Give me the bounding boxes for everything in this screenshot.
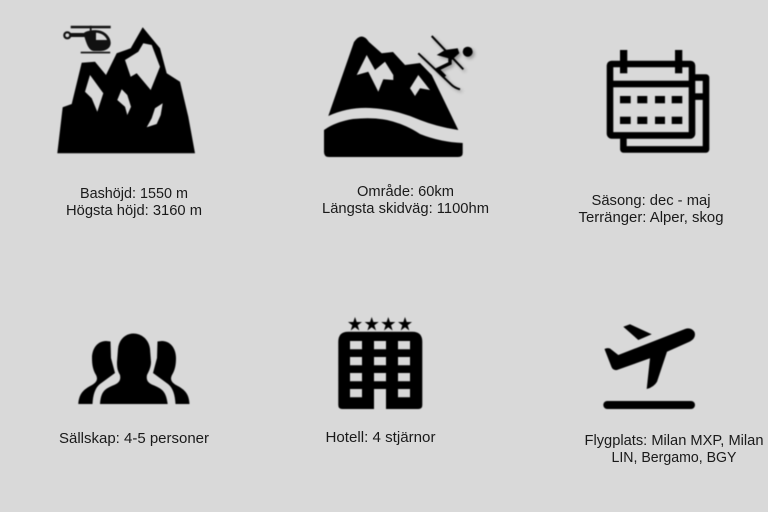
text: season: Terränger: Alper, skog: [578, 210, 724, 226]
text: ski area: Längsta skidväg: 1100hm: [322, 201, 489, 217]
text: altitude: [66, 186, 202, 219]
panel: airport: [584, 324, 764, 466]
icon: helicopter: [64, 26, 111, 53]
icon: people: [78, 334, 190, 404]
icon: hotel: [338, 317, 422, 409]
panel: group size: [59, 334, 209, 447]
icon: mountain with helicopter: [57, 26, 195, 153]
panel: ski area: [322, 36, 489, 217]
text: season: Säsong: dec - maj: [592, 193, 710, 209]
text: hotel: Hotell: 4 stjärnor: [326, 430, 436, 446]
icon: airplane taking off: [603, 324, 695, 409]
text: airport: [584, 433, 764, 466]
text: airport: Flygplats: Milan MXP, Milan: [584, 433, 764, 449]
panel: hotel: [326, 317, 436, 446]
text: group size: Sällskap: 4-5 personer: [59, 431, 209, 447]
icon: four stars: [348, 317, 412, 330]
text: altitude: Högsta höjd: 3160 m: [66, 203, 202, 219]
text: ski area: Område: 60km: [357, 184, 454, 200]
icon: skier: [418, 36, 473, 89]
text: altitude: Bashöjd: 1550 m: [80, 186, 188, 202]
text: ski area: [322, 184, 489, 217]
icon: ski mountain: [324, 36, 473, 157]
panel: season: [578, 50, 724, 226]
text: airport: LIN, Bergamo, BGY: [612, 450, 737, 466]
panel: altitude: [57, 26, 202, 219]
text: season: [578, 193, 724, 226]
icon: calendar: [610, 50, 707, 149]
